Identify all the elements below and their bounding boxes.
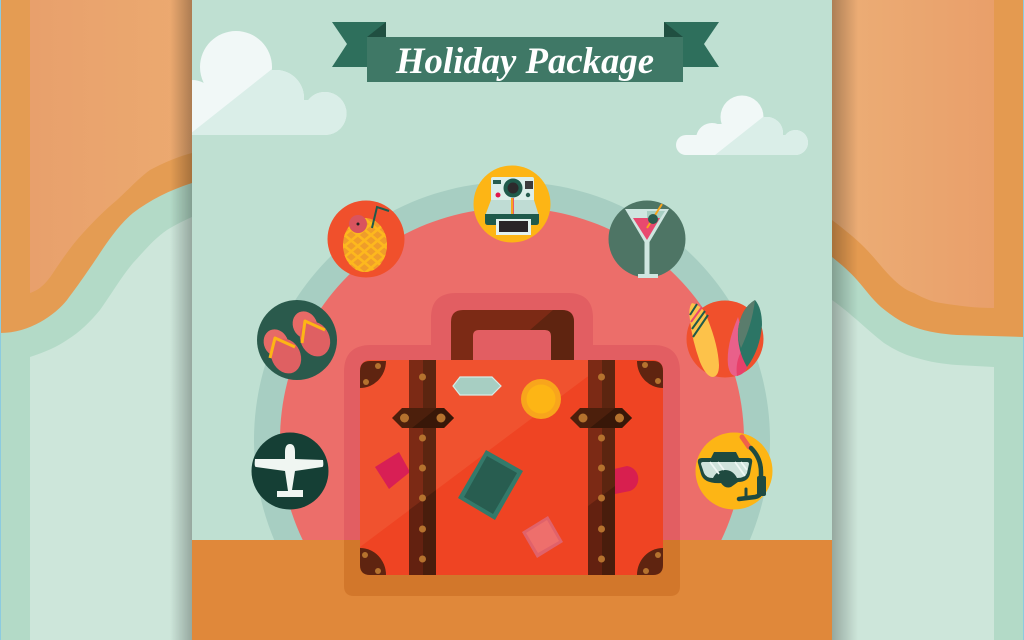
luggage tag [453, 377, 501, 395]
title ribbon [332, 22, 719, 82]
cloud: left [192, 31, 346, 135]
ribbon tail: right [664, 22, 719, 67]
title: Holiday Package [395, 41, 654, 82]
corner guard: bottom left [360, 548, 386, 575]
sticker: crimson square [375, 452, 410, 489]
buckle: right [570, 408, 632, 428]
centre panel background [192, 0, 832, 640]
corner guard: top right [637, 361, 663, 388]
icon: airplane [252, 432, 328, 510]
suitcase handle [451, 310, 574, 360]
strap: right [588, 360, 615, 575]
sticker: crimson round [610, 466, 638, 495]
suitcase [360, 305, 663, 575]
sun rings [254, 182, 770, 540]
icon: surfboards [686, 300, 764, 378]
buckle: left [392, 408, 454, 428]
sticker: pale stamp [522, 516, 563, 558]
corner guard: bottom right [637, 548, 663, 575]
cloud: right [676, 96, 808, 155]
sticker: sun [521, 379, 561, 419]
icon: flip-flops [257, 300, 337, 380]
ribbon band [367, 37, 683, 82]
ribbon fold: right [664, 22, 683, 37]
ground [192, 540, 832, 640]
ribbon tail: left [332, 22, 386, 67]
icon: instant camera [474, 166, 550, 242]
left curtain panel [0, 0, 192, 640]
icon: pineapple drink [328, 200, 404, 278]
sticker: green stamp [458, 450, 523, 520]
corner guard: top left [360, 361, 386, 388]
icon: snorkel mask [696, 432, 772, 510]
ribbon fold: left [367, 22, 386, 37]
suitcase body [360, 360, 663, 575]
icon: martini [608, 200, 686, 278]
right curtain panel [832, 0, 1024, 640]
suitcase halo [344, 293, 680, 596]
strap: left [409, 360, 436, 575]
